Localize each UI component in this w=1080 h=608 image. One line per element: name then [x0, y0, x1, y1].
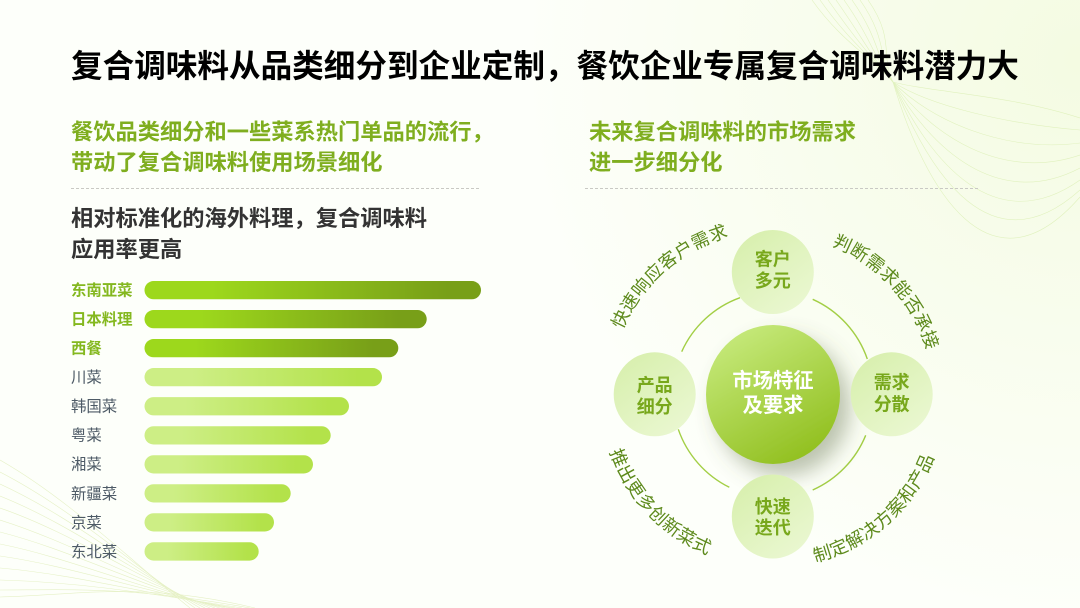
node: 产品细分 — [614, 352, 696, 436]
node: 客户多元: 客户 — [755, 248, 791, 270]
node: 快速迭代 — [732, 474, 814, 558]
left dark subheading — [71, 206, 427, 262]
bar: 韩国菜: 韩国菜 — [71, 398, 117, 416]
bar: 新疆菜: 新疆菜 — [71, 485, 117, 503]
right panel: future market demand — [585, 118, 978, 562]
curved label: top right: 判断需求能否承接 — [832, 234, 940, 350]
bar: 川菜 — [71, 368, 382, 386]
left green heading: 带动了复合调味料使用场景细化 — [71, 150, 382, 175]
right green heading: 进一步细分化 — [589, 150, 722, 175]
node: 快速迭代: 迭代 — [755, 518, 791, 538]
bar: 新疆菜 — [71, 484, 291, 503]
bar: 东北菜 — [71, 542, 259, 561]
node: 客户多元: 多元 — [755, 271, 791, 291]
bar: 湘菜 — [71, 455, 313, 474]
curved label: bottom right: 制定解决方案和产品 — [813, 455, 935, 562]
bar: 京菜 — [71, 513, 274, 532]
bar: 东北菜: 东北菜 — [71, 543, 117, 561]
bar: 东南亚菜: 东南亚菜 — [71, 280, 133, 300]
right green heading: 未来复合调味料的市场需求 — [589, 118, 856, 144]
node: 快速迭代: 快速 — [755, 497, 791, 517]
bar: 西餐: 西餐 — [71, 338, 102, 358]
left panel: cuisine segmentation — [71, 120, 494, 561]
connecting ring arcs — [678, 298, 867, 490]
curved label: top left: 快速响应客户需求 — [610, 224, 728, 328]
bar: 日本料理: 日本料理 — [71, 310, 133, 328]
right green heading — [589, 118, 856, 175]
left dark subheading: 相对标准化的海外料理，复合调味料 — [71, 206, 427, 231]
bar: 粤菜: 粤菜 — [71, 426, 102, 444]
node: 需求分散: 分散 — [874, 394, 910, 414]
bar: 西餐 — [71, 338, 398, 358]
center circle: 及要求 — [743, 394, 803, 417]
center circle: 市场特征 — [732, 368, 814, 392]
bar: 湘菜: 湘菜 — [71, 456, 102, 474]
node: 产品细分: 产品 — [637, 376, 673, 396]
curved label: bottom left: 推出更多创新菜式 — [608, 448, 712, 556]
left dark subheading: 应用率更高 — [71, 236, 182, 262]
node: 需求分散 — [851, 352, 933, 436]
bar: 日本料理 — [71, 310, 427, 328]
left green heading — [71, 120, 494, 175]
bar: 京菜: 京菜 — [71, 514, 102, 532]
node: 客户多元 — [732, 230, 814, 314]
bar: 川菜: 川菜 — [71, 368, 102, 386]
center circle — [706, 325, 840, 464]
bar: 韩国菜 — [71, 397, 349, 416]
node: 需求分散: 需求 — [874, 372, 910, 392]
bar: 东南亚菜 — [71, 280, 481, 300]
bar chart: cuisine ranking — [71, 280, 481, 561]
title: 复合调味料从品类细分到企业定制，餐饮企业专属复合调味料潜力大 — [71, 48, 1019, 84]
bar: 粤菜 — [71, 426, 331, 444]
node: 产品细分: 细分 — [637, 397, 673, 417]
ring diagram — [608, 224, 940, 562]
left green heading: 餐饮品类细分和一些菜系热门单品的流行， — [71, 120, 494, 144]
